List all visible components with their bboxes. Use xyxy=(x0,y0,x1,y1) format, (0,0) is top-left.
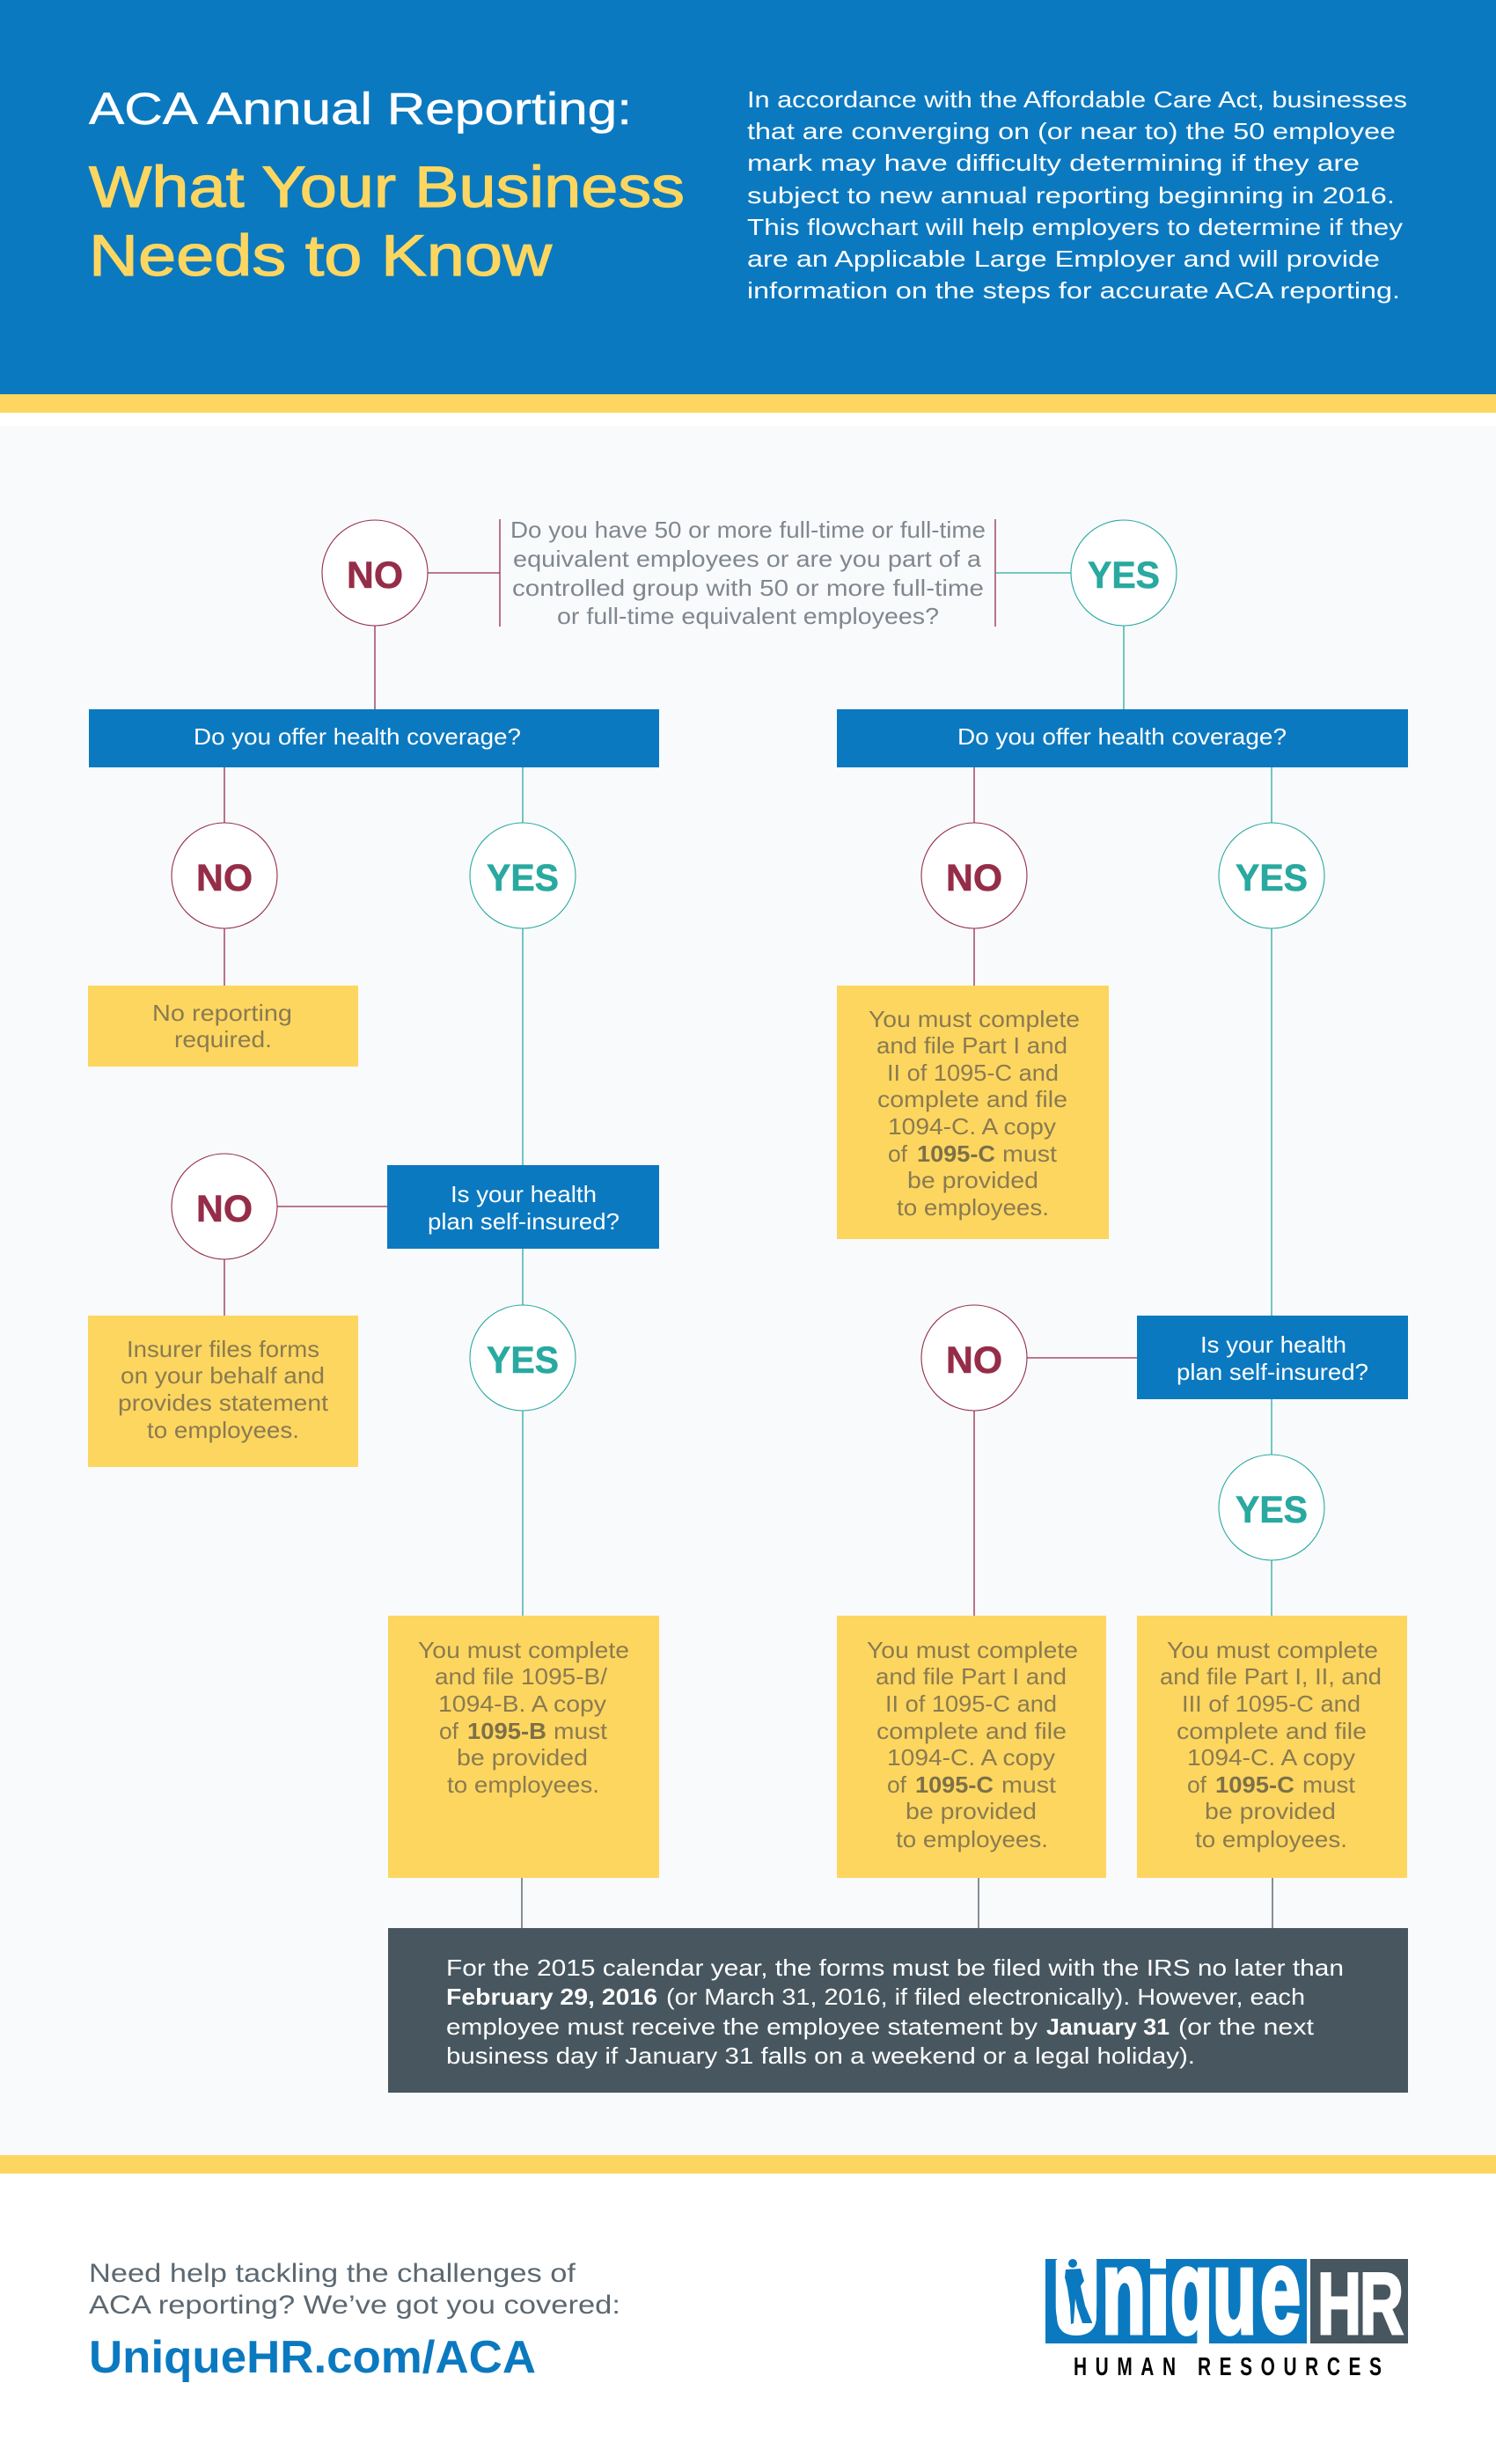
result box: 1095-C Part I and II: to employees. xyxy=(896,1826,1048,1852)
NO circle: left coverage xyxy=(172,823,277,928)
result box: 1095-C Part I and II xyxy=(837,1616,1106,1878)
result box: 1095-C Part I and II: must xyxy=(1001,1771,1057,1798)
result box: insurer files forms: provides statement xyxy=(118,1390,329,1416)
result box: 1095-C Part I and II: and file Part I and xyxy=(876,1663,1067,1690)
result box: 1095-B: 1094-B. A copy xyxy=(438,1690,606,1717)
deadline callout: For the 2015 calendar year, the forms must be filed with the IRS no later than xyxy=(446,1954,1344,1981)
YES circle: right self-insured: YES xyxy=(1236,1489,1308,1531)
result box: right 1095-C no coverage: be provided xyxy=(907,1167,1038,1193)
result box: insurer files forms: Insurer files forms xyxy=(127,1336,319,1362)
logo: Unique HR: q xyxy=(1170,2225,1213,2358)
title: Needs to Know xyxy=(89,223,552,288)
result box: no reporting required: required. xyxy=(174,1026,272,1052)
logo: Unique HR: HUMAN RESOURCES xyxy=(1074,2353,1382,2381)
connector lines xyxy=(224,519,1272,1928)
result box: 1095-B: must xyxy=(554,1718,608,1744)
footer call to action: Need help tackling the challenges of xyxy=(89,2259,576,2288)
YES circle: left coverage xyxy=(470,823,576,928)
result box: right 1095-C no coverage: complete and file xyxy=(877,1086,1067,1112)
intro text: This flowchart will help employers to determine if they xyxy=(747,214,1403,240)
result box: 1095-C Part I, II and III: to employees. xyxy=(1195,1826,1347,1852)
logo: Unique HR: e xyxy=(1260,2224,1301,2358)
footer stripe xyxy=(0,2155,1496,2174)
question box: right self-insured: plan self-insured? xyxy=(1177,1359,1368,1385)
NO circle: right self-insured: NO xyxy=(946,1339,1002,1382)
question box: left self-insured: Is your health xyxy=(451,1181,597,1207)
result box: right 1095-C no coverage: You must complete xyxy=(869,1006,1080,1032)
deadline callout: (or the next xyxy=(1178,2013,1315,2040)
question box: right self-insured: Is your health xyxy=(1200,1331,1346,1358)
logo: Unique HR xyxy=(1045,2259,1408,2376)
result box: no reporting required xyxy=(88,986,358,1067)
result box: insurer files forms: on your behalf and xyxy=(121,1362,325,1389)
result box: 1095-C Part I and II: You must complete xyxy=(867,1637,1078,1663)
intro text: In accordance with the Affordable Care Act, businesses xyxy=(747,86,1407,113)
intro text: subject to new annual reporting beginning in 2016. xyxy=(747,182,1395,209)
result box: 1095-C Part I and II: II of 1095-C and xyxy=(885,1690,1057,1717)
result box: 1095-B: to employees. xyxy=(447,1771,599,1798)
top question: equivalent employees or are you part of a xyxy=(513,546,982,572)
top question xyxy=(510,517,986,629)
result box: insurer files forms: to employees. xyxy=(147,1417,299,1443)
logo: Unique HR: R xyxy=(1360,2255,1404,2352)
deadline callout: business day if January 31 falls on a weekend or a legal holiday). xyxy=(446,2042,1195,2069)
result box: right 1095-C no coverage: to employees. xyxy=(897,1194,1049,1221)
result box: 1095-C Part I, II and III: of xyxy=(1187,1771,1207,1798)
result box: 1095-C Part I, II and III: 1094-C. A copy xyxy=(1187,1744,1355,1771)
result box: 1095-C Part I and II: 1095-C xyxy=(915,1771,994,1798)
header band xyxy=(0,0,1496,413)
question box: left self-insured: plan self-insured? xyxy=(428,1208,620,1235)
question box: right self-insured xyxy=(1137,1316,1408,1399)
NO circle: left coverage: NO xyxy=(196,857,253,899)
result box: 1095-C Part I, II and III: You must complete xyxy=(1167,1637,1378,1663)
result box: 1095-C Part I, II and III: 1095-C xyxy=(1215,1771,1294,1798)
result box: 1095-C Part I, II and III xyxy=(1137,1616,1407,1878)
logo: Unique HR: U xyxy=(1053,2241,1099,2354)
result box: 1095-C Part I, II and III: be provided xyxy=(1205,1798,1336,1824)
result box: 1095-C Part I and II: of xyxy=(887,1771,907,1798)
logo: Unique HR: H xyxy=(1317,2255,1361,2352)
logo: Unique HR: i xyxy=(1146,2236,1170,2356)
deadline callout xyxy=(388,1928,1408,2093)
result box: right 1095-C no coverage: 1094-C. A copy xyxy=(888,1113,1056,1140)
top question: Do you have 50 or more full-time or full-time xyxy=(510,517,986,543)
icon: standing man silhouette xyxy=(1065,2259,1092,2324)
result box: 1095-C Part I, II and III: complete and file xyxy=(1177,1718,1367,1744)
YES circle: left self-insured: YES xyxy=(487,1339,559,1382)
intro text: information on the steps for accurate ACA reporting. xyxy=(747,277,1400,304)
result box: 1095-C Part I and II: be provided xyxy=(906,1798,1037,1824)
intro text: that are converging on (or near to) the 50 employee xyxy=(747,118,1396,144)
question box: right coverage xyxy=(837,709,1408,767)
top question: or full-time equivalent employees? xyxy=(557,603,939,629)
NO circle: left self-insured xyxy=(172,1154,277,1259)
intro text: mark may have difficulty determining if they are xyxy=(747,150,1360,176)
result box: 1095-C Part I, II and III: III of 1095-C and xyxy=(1182,1690,1360,1717)
NO circle: top: NO xyxy=(347,554,403,597)
YES circle: left self-insured xyxy=(470,1305,576,1411)
deadline callout: February 29, 2016 xyxy=(446,1984,657,2010)
footer call to action xyxy=(89,2259,620,2383)
result box: right 1095-C no coverage: and file Part I and xyxy=(876,1032,1067,1059)
result box: right 1095-C no coverage: 1095-C xyxy=(917,1140,995,1167)
footer call to action: UniqueHR.com/ACA xyxy=(89,2332,536,2383)
YES circle: right self-insured xyxy=(1219,1455,1324,1560)
result box: right 1095-C no coverage xyxy=(837,986,1109,1239)
YES circle: left coverage: YES xyxy=(487,857,559,899)
question box: left coverage: Do you offer health coverage? xyxy=(194,723,521,750)
question box: left coverage xyxy=(89,709,659,767)
result box: 1095-B: of xyxy=(439,1718,459,1744)
intro text xyxy=(747,86,1407,304)
result box: no reporting required: No reporting xyxy=(152,1000,292,1026)
deadline callout: January 31 xyxy=(1046,2013,1170,2040)
NO circle: top xyxy=(322,520,428,626)
question box: left self-insured xyxy=(387,1165,659,1249)
result box: 1095-C Part I and II: 1094-C. A copy xyxy=(887,1744,1055,1771)
YES circle: right coverage: YES xyxy=(1236,857,1308,899)
title: What Your Business xyxy=(89,154,685,219)
result box: insurer files forms xyxy=(88,1316,358,1467)
deadline callout: (or March 31, 2016, if filed electronically). However, each xyxy=(666,1984,1305,2010)
intro text: are an Applicable Large Employer and will provide xyxy=(747,246,1380,272)
result box: 1095-B xyxy=(388,1616,659,1878)
logo: Unique HR: u xyxy=(1213,2225,1257,2358)
result box: right 1095-C no coverage: II of 1095-C and xyxy=(887,1060,1059,1086)
result box: 1095-B: You must complete xyxy=(418,1637,629,1663)
footer call to action: ACA reporting? We’ve got you covered: xyxy=(89,2291,620,2320)
NO circle: right coverage xyxy=(921,823,1027,928)
YES circle: top: YES xyxy=(1088,554,1160,597)
YES circle: right coverage xyxy=(1219,823,1324,928)
NO circle: left self-insured: NO xyxy=(196,1188,253,1230)
result box: right 1095-C no coverage: must xyxy=(1002,1140,1058,1167)
result box: 1095-C Part I and II: complete and file xyxy=(876,1718,1067,1744)
result box: 1095-B: be provided xyxy=(457,1744,588,1771)
result box: right 1095-C no coverage: of xyxy=(888,1140,908,1167)
question box: right coverage: Do you offer health coverage? xyxy=(957,723,1287,750)
title xyxy=(89,84,685,288)
result box: 1095-B: 1095-B xyxy=(467,1718,546,1744)
deadline callout: employee must receive the employee statement by xyxy=(446,2013,1038,2040)
YES circle: top xyxy=(1071,520,1177,626)
NO circle: right coverage: NO xyxy=(946,857,1002,899)
result box: 1095-B: and file 1095-B/ xyxy=(435,1663,608,1690)
result box: 1095-C Part I, II and III: and file Part I, II, and xyxy=(1160,1663,1382,1690)
top question: controlled group with 50 or more full-time xyxy=(512,575,984,601)
result box: 1095-C Part I, II and III: must xyxy=(1302,1771,1356,1798)
title: ACA Annual Reporting: xyxy=(89,84,632,134)
logo: Unique HR: n xyxy=(1102,2225,1146,2358)
NO circle: right self-insured xyxy=(921,1305,1027,1411)
